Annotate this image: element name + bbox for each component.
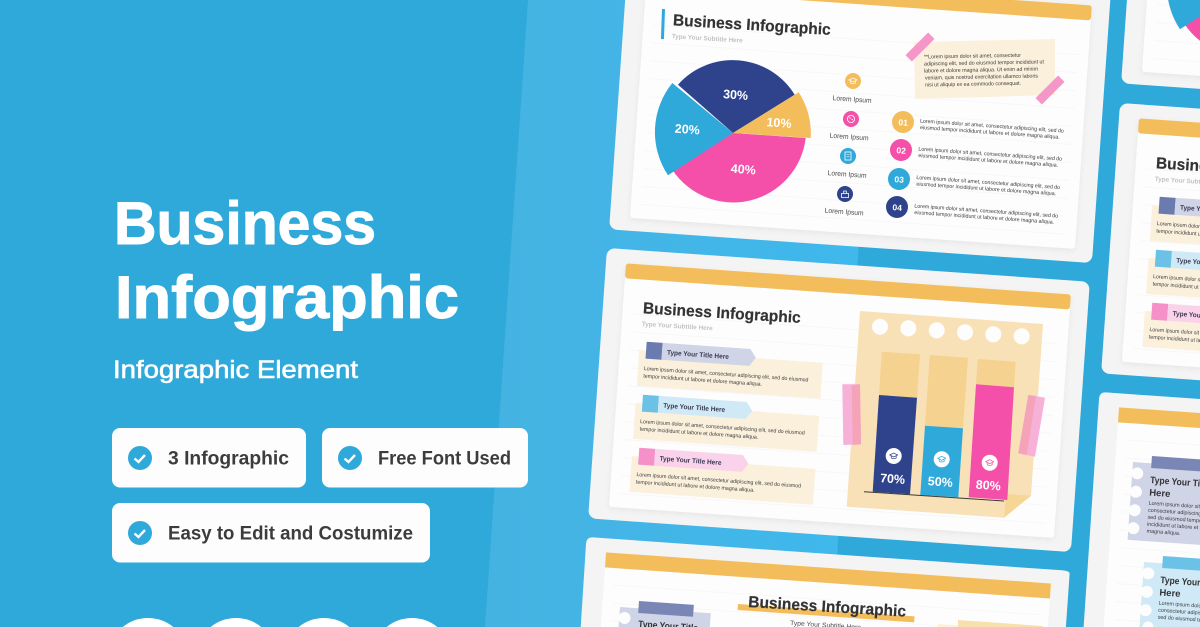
bar 70%: 70% xyxy=(880,471,906,487)
item 01: eiusmod tempor incididunt ut labore et dolore magna aliqua. xyxy=(920,125,1060,141)
text row 1 xyxy=(637,341,823,399)
sticky note: veniam, quis nostrud exercitation ullamco laboris xyxy=(925,74,1038,81)
partial pie xyxy=(1167,0,1200,56)
title underline xyxy=(738,604,915,622)
note card 1: Here xyxy=(1149,488,1171,500)
slide 3 inner sheet xyxy=(601,552,1051,627)
note card 1 xyxy=(1127,455,1200,546)
pie chart: 20% xyxy=(674,122,700,137)
sticky note: labore et dolore magna aliqua. Ut enim ad minim xyxy=(924,67,1039,74)
note card 1: magna aliqua. xyxy=(1146,529,1181,537)
text row 1: Lorem ipsum dolor sit amet, consectetur adipiscing elit, sed do eiusmod xyxy=(644,366,809,384)
bar 80% xyxy=(969,384,1014,500)
pie chart: 40% xyxy=(730,162,756,177)
icon: book xyxy=(840,148,856,164)
pie chart: 10% xyxy=(766,115,792,131)
text row 2: Type Your Title Here xyxy=(663,403,726,414)
accent bar xyxy=(661,9,665,39)
item 01: Lorem ipsum dolor sit amet, consectetur adipiscing elit, sed do xyxy=(920,119,1064,135)
feature pill: Free Font Used: Free Font Used xyxy=(378,448,511,470)
sticky note: **Lorem ipsum dolor sit amet, consectetur xyxy=(924,53,1021,60)
slide 5 row 3 xyxy=(1142,302,1200,360)
item 02: 02 xyxy=(896,145,907,156)
item 01: 01 xyxy=(898,117,909,128)
slide 4 frame xyxy=(1121,0,1200,117)
slide: partial notes right xyxy=(1084,392,1200,627)
pie chart xyxy=(655,60,811,202)
slide 2 subtitle: Type Your Subtitle Here xyxy=(642,321,713,332)
slide 1 subtitle: Type Your Subtitle Here xyxy=(672,33,743,45)
item 03 xyxy=(888,168,1060,197)
feature pill: Easy to Edit and Costumize xyxy=(112,503,430,562)
main heading: Business xyxy=(114,190,376,257)
item 03: Lorem ipsum dolor sit amet, consectetur adipiscing elit, sed do xyxy=(916,175,1060,191)
right note paper xyxy=(938,620,1043,627)
feature pill: 3 Infographic: 3 Infographic xyxy=(168,448,289,470)
slide 5 row 2 xyxy=(1146,249,1200,307)
slide 5 row 1 xyxy=(1150,196,1200,254)
note card xyxy=(618,601,711,627)
bar 50% xyxy=(920,426,963,497)
slide: partial list right xyxy=(1101,103,1200,407)
numbered list xyxy=(886,111,1064,226)
text row 3: Type Your Title Here xyxy=(659,456,722,467)
feature pill: Easy to Edit and Costumize: Easy to Edit and Costumize xyxy=(168,524,413,544)
slide 3 header band xyxy=(605,552,1051,598)
slide 3 outer frame xyxy=(581,537,1070,627)
text row 3 xyxy=(629,447,816,505)
item 04: 04 xyxy=(892,202,903,213)
bar 70% xyxy=(873,395,917,494)
feature pill: 3 Infographic xyxy=(112,428,306,488)
item 04 xyxy=(886,196,1058,226)
slide 6 header band xyxy=(1118,407,1200,428)
icon column: Lorem Ipsum xyxy=(827,170,867,180)
feature pill: Free Font Used xyxy=(322,428,528,488)
text row 1: tempor incididunt ut labore et dolore magna aliqua. xyxy=(643,374,762,388)
sticky note: adipiscing elit, sed do eiusmod tempor incididunt ut xyxy=(924,59,1045,67)
slide 1 title: Business Infographic xyxy=(672,12,831,39)
item 02: Lorem ipsum dolor sit amet, consectetur adipiscing elit, sed do xyxy=(918,147,1062,163)
text row 2 xyxy=(633,394,820,452)
item 03: 03 xyxy=(894,174,905,185)
slide 5 frame xyxy=(1101,103,1200,407)
slide: notes layout xyxy=(581,537,1070,627)
slide 1 frame xyxy=(609,0,1111,263)
text row 1: Type Your Title Here xyxy=(667,350,729,361)
sticky note xyxy=(906,33,1064,104)
text row 2: Lorem ipsum dolor sit amet, consectetur adipiscing elit, sed do eiusmod xyxy=(640,419,805,437)
slide 2 frame xyxy=(588,248,1090,552)
pie chart: 30% xyxy=(723,87,749,103)
main heading: Infographic xyxy=(115,264,459,331)
text row 3: Lorem ipsum dolor sit amet, consectetur adipiscing elit, sed do eiusmod xyxy=(636,472,801,490)
item 02 xyxy=(890,139,1062,169)
bar 80%: 80% xyxy=(975,478,1001,493)
icon: palette xyxy=(843,111,859,127)
icon column: Lorem Ipsum xyxy=(824,208,864,217)
text row 3: tempor incididunt ut labore et dolore magna aliqua. xyxy=(636,480,755,494)
icon column: Lorem Ipsum xyxy=(829,133,869,142)
note card 2: Here xyxy=(1159,587,1181,600)
icon column: Lorem Ipsum xyxy=(832,95,872,105)
slide: bar chart xyxy=(588,248,1090,552)
item 04: Lorem ipsum dolor sit amet, consectetur adipiscing elit, sed do xyxy=(914,204,1058,220)
left tape xyxy=(842,384,861,445)
item 04: eiusmod tempor incididunt ut labore et dolore magna aliqua. xyxy=(914,210,1054,226)
slide: pie chart xyxy=(609,0,1111,263)
bottom circles xyxy=(123,618,437,627)
slide 6 outer frame xyxy=(1084,392,1200,627)
subheading: Infographic Element xyxy=(113,356,358,384)
slide 2 title: Business Infographic xyxy=(642,300,801,327)
icon: bag xyxy=(837,186,853,202)
icon: graduation cap xyxy=(845,73,861,89)
slide 6 inner sheet xyxy=(1104,407,1200,627)
sticky note: nisi ut aliquip ex ea commodo consequat. xyxy=(925,81,1021,88)
icon column xyxy=(824,73,872,217)
slide: partial pie top right xyxy=(1121,0,1200,117)
main heading xyxy=(114,190,459,331)
text row 2: tempor incididunt ut labore et dolore magna aliqua. xyxy=(639,427,758,441)
slide 3 title: Business Infographic xyxy=(748,594,907,621)
bar 50%: 50% xyxy=(927,474,953,490)
background light band xyxy=(485,0,876,627)
right tape xyxy=(1018,395,1045,457)
item 01 xyxy=(892,111,1064,141)
item 03: eiusmod tempor incididunt ut labore et dolore magna aliqua. xyxy=(916,182,1056,197)
item 02: eiusmod tempor incididunt ut labore et dolore magna aliqua. xyxy=(918,153,1058,169)
note card 2 xyxy=(1139,555,1200,627)
notepad bar chart xyxy=(847,311,1043,518)
